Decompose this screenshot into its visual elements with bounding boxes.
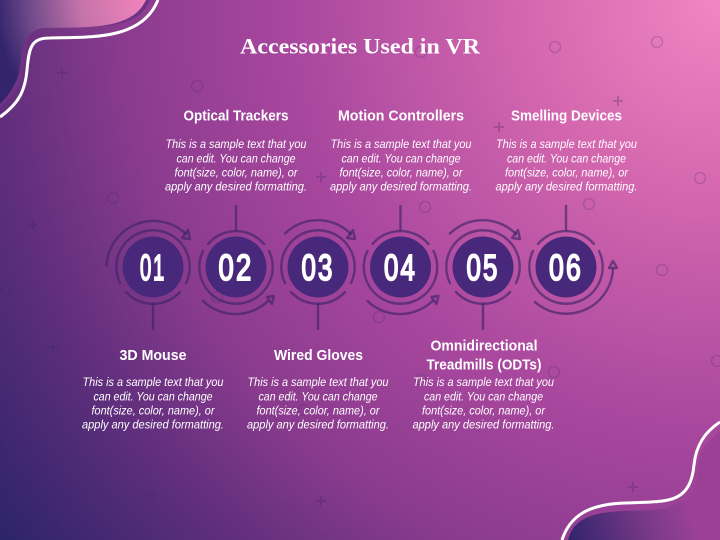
step 06: Smelling Devices [496,108,638,314]
description 05: can edit. You can change [424,392,543,404]
connector 03 [317,304,319,329]
connector 05 [482,304,484,329]
step 02: Optical Trackers [165,108,307,314]
description 06: can edit. You can change [507,154,626,166]
step 03: Wired Gloves [247,220,389,432]
description 01: can edit. You can change [94,392,212,404]
badge 04 [364,231,438,314]
step 01: 3D Mouse [82,221,224,432]
description 04 [330,139,472,194]
description 02: can edit. You can change [176,154,296,166]
description 06: apply any desired formatting. [496,182,638,194]
description 01: font(size, color, name), or [92,406,216,418]
badge 06: 06 [549,247,583,288]
description 01: apply any desired formatting. [82,420,224,432]
description 02: font(size, color, name), or [174,168,299,180]
connector 04 [399,206,402,230]
description 04: This is a sample text that you [330,139,472,151]
connector 01 [152,304,154,329]
description 06: This is a sample text that you [496,139,638,151]
description 04: apply any desired formatting. [330,182,472,194]
badge 01: 01 [140,247,166,288]
description 03: can edit. You can change [258,392,378,404]
connector 02 [235,206,237,230]
heading 02: Optical Trackers [184,108,288,124]
description 05 [412,377,555,432]
badge 02 [199,231,274,314]
description 06: font(size, color, name), or [505,168,629,180]
badge 02: 02 [218,247,254,288]
connector 06 [565,206,567,230]
description 06 [496,139,638,194]
badge 05: 05 [466,247,500,288]
description 03 [247,377,389,432]
badge 03: 03 [302,247,334,288]
description 04: font(size, color, name), or [340,168,464,180]
step 04: Motion Controllers [330,108,472,314]
badge 01 [106,221,190,304]
title: Accessories Used in VR [240,34,481,58]
description 03: apply any desired formatting. [247,420,389,432]
description 03: This is a sample text that you [248,377,389,389]
description 05: apply any desired formatting. [412,420,554,432]
description 03: font(size, color, name), or [256,406,381,418]
step 05: Omnidirectional Treadmills [412,220,555,432]
description 05: This is a sample text that you [413,377,555,389]
heading 05 [426,338,542,374]
badge 03 [281,220,355,304]
heading 05: Treadmills (ODTs) [426,356,542,374]
badge 04: 04 [384,247,417,288]
description 04: can edit. You can change [342,154,460,166]
description 05: font(size, color, name), or [422,406,546,418]
heading 04: Motion Controllers [338,108,464,124]
heading 01: 3D Mouse [120,347,186,364]
description 02 [165,139,307,194]
bottom-right corner wave [562,422,720,540]
description 01: This is a sample text that you [82,377,224,389]
badge 06 [529,231,617,314]
description 02: This is a sample text that you [166,139,307,151]
description 02: apply any desired formatting. [165,182,307,194]
heading 03: Wired Gloves [274,347,363,364]
heading 05: Omnidirectional [430,338,538,354]
top-left corner wave [0,0,158,117]
badge 05 [446,220,520,304]
description 01 [82,377,224,432]
heading 06: Smelling Devices [511,108,622,124]
